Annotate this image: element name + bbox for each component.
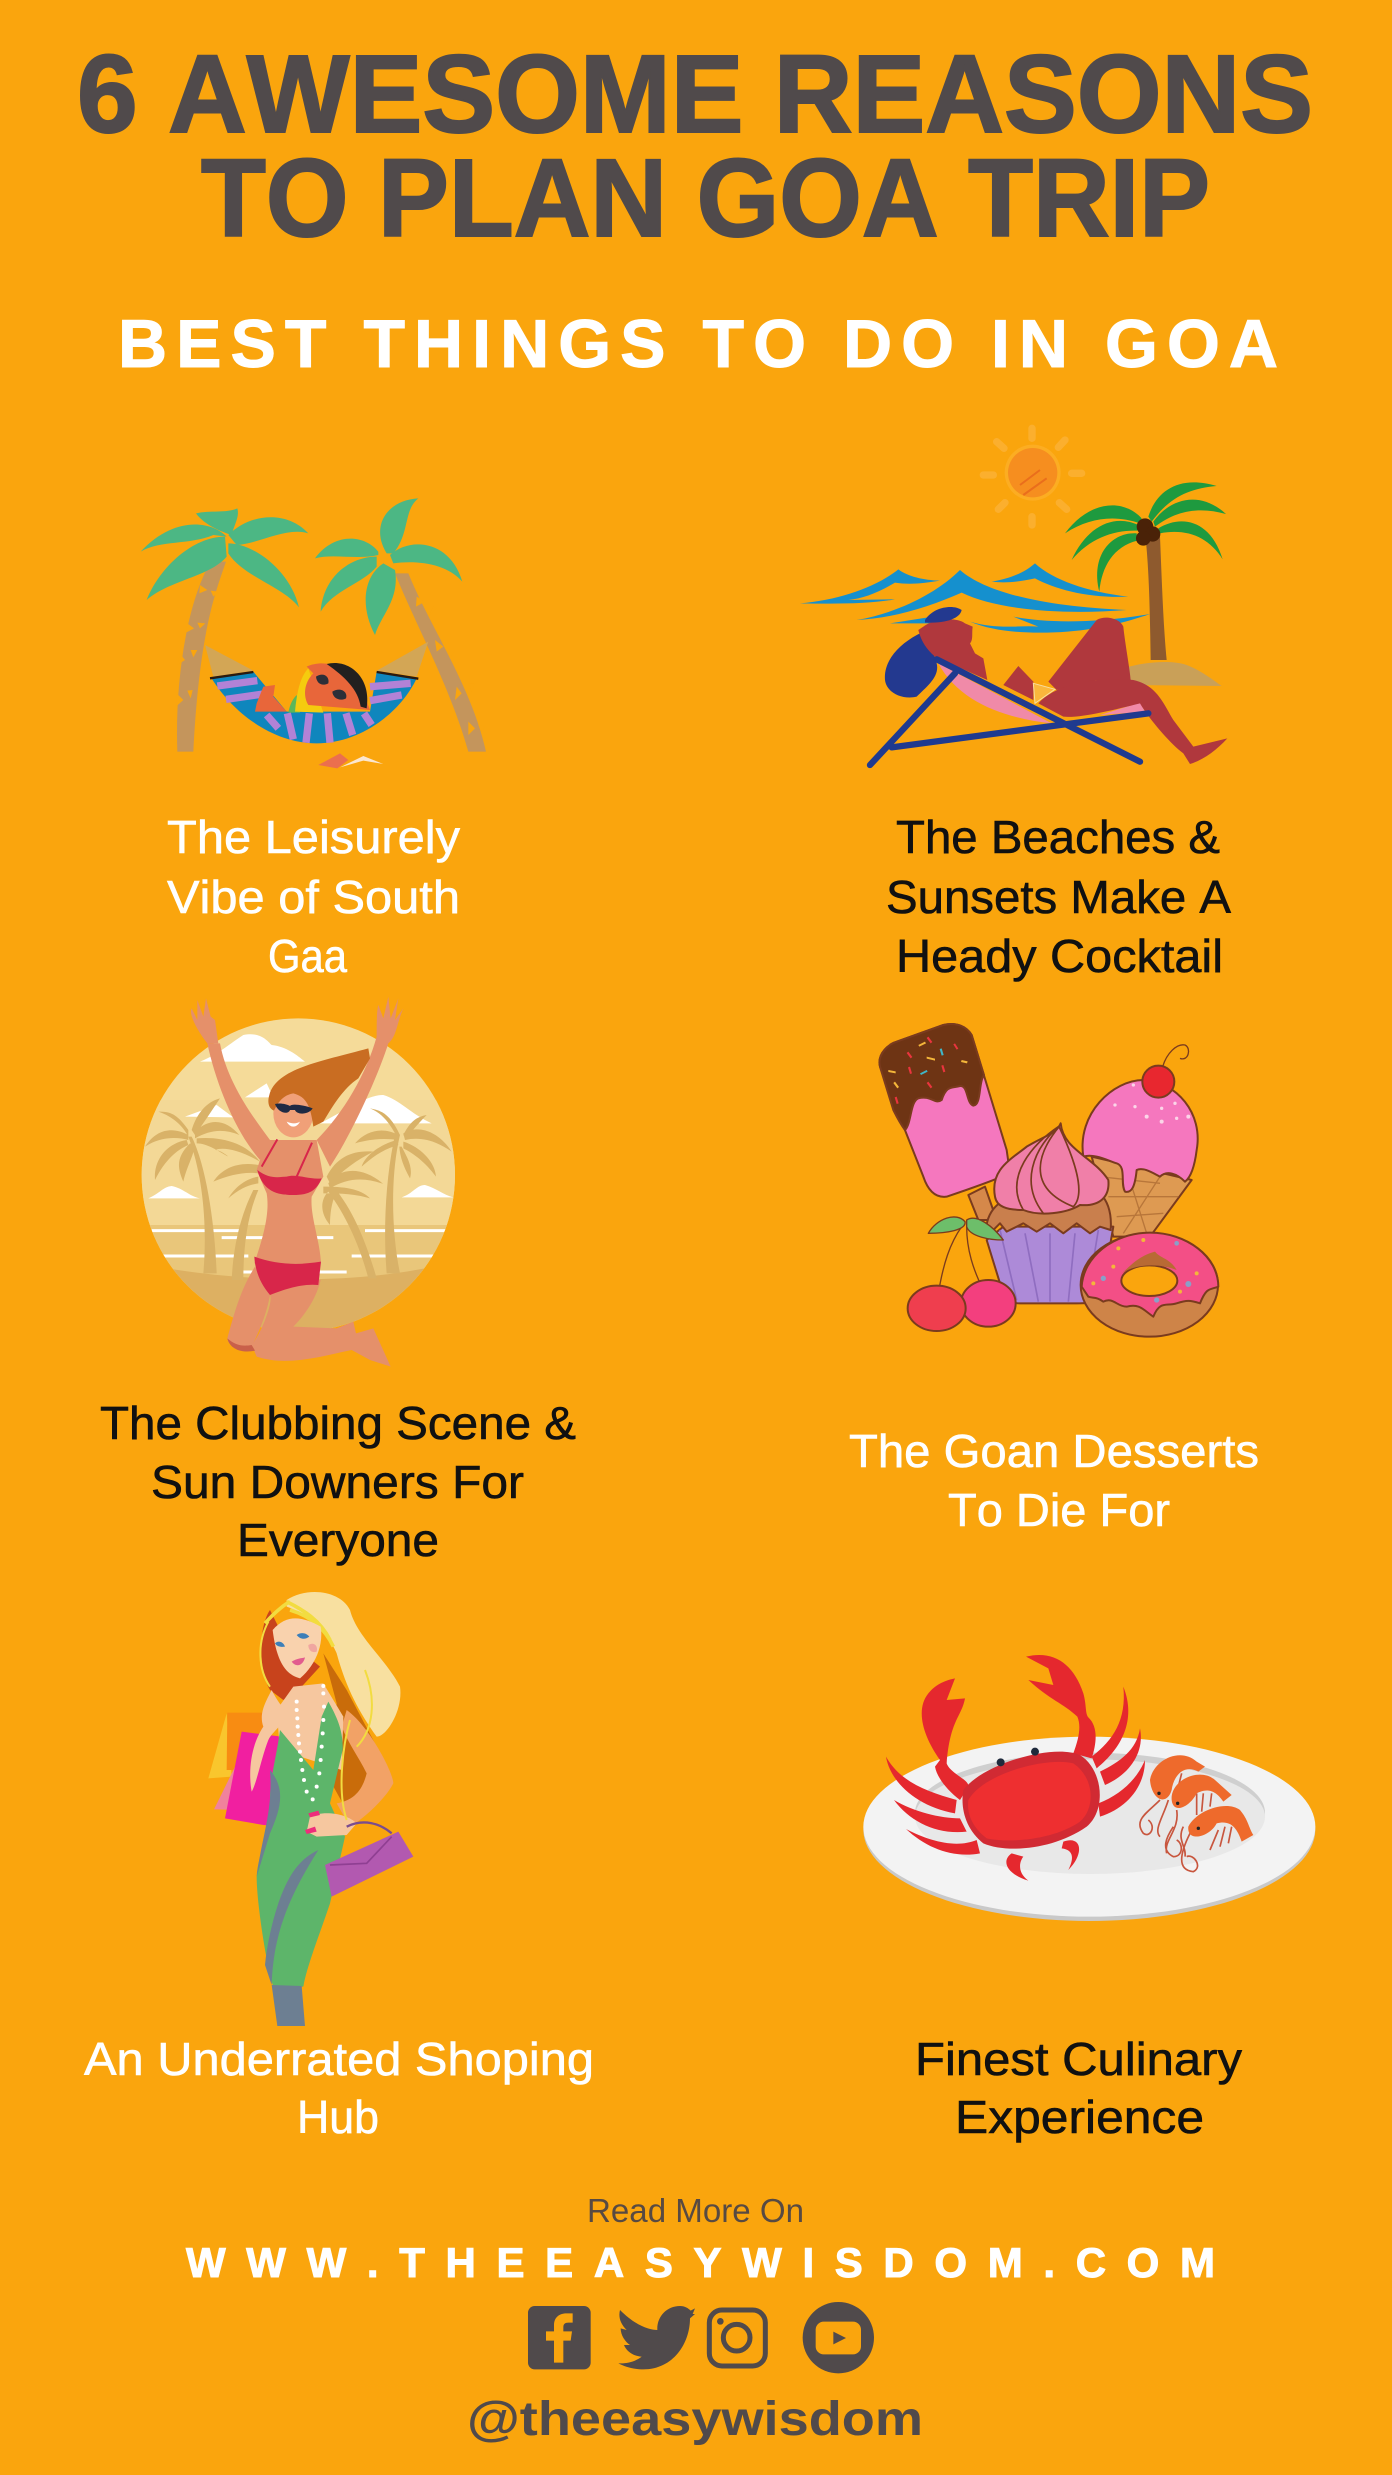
caption: leisurely vibe — [167, 811, 460, 982]
icon: facebook — [528, 2306, 591, 2369]
caption: shopping hub: Hub — [297, 2091, 379, 2143]
icon: hammock between palm trees — [141, 498, 486, 768]
icon: woman with shopping bags — [208, 1592, 413, 2026]
caption: goan desserts: The Goan Desserts — [849, 1425, 1259, 1477]
icon: youtube — [803, 2302, 874, 2373]
caption: beaches and sunsets: The Beaches & — [896, 811, 1220, 863]
caption: beaches and sunsets: Sunsets Make A — [886, 871, 1231, 923]
caption: clubbing scene: The Clubbing Scene & — [100, 1397, 576, 1449]
title — [77, 33, 1313, 260]
title: 6 AWESOME REASONS — [77, 33, 1313, 156]
subtitle: BEST THINGS TO DO IN GOA — [118, 306, 1278, 382]
caption: clubbing scene — [100, 1397, 576, 1566]
caption: beaches and sunsets: Heady Cocktail — [896, 930, 1223, 982]
icon: crab and prawns on plate — [863, 1655, 1315, 1921]
social icons — [528, 2302, 874, 2373]
caption: leisurely vibe: Vibe of South — [167, 871, 460, 923]
title: TO PLAN GOA TRIP — [201, 137, 1210, 260]
caption: leisurely vibe: Gaa — [268, 930, 347, 982]
caption: culinary experience: Finest Culinary — [915, 2033, 1242, 2085]
icon: instagram — [709, 2310, 765, 2366]
caption: shopping hub: An Underrated Shoping — [84, 2033, 594, 2085]
icon: goan desserts — [879, 1024, 1218, 1337]
social handle: @theeasywisdom — [467, 2393, 923, 2446]
caption: goan desserts — [849, 1425, 1259, 1536]
caption: shopping hub — [84, 2033, 594, 2143]
caption: clubbing scene: Sun Downers For — [151, 1456, 524, 1508]
caption: culinary experience — [915, 2033, 1242, 2143]
caption: goan desserts: To Die For — [948, 1484, 1170, 1536]
icon: jumping woman on beach — [140, 997, 460, 1367]
icon: woman on beach deck chair — [800, 428, 1227, 765]
website url: WWW.THEEASYWISDOM.COM — [186, 2239, 1215, 2286]
caption: clubbing scene: Everyone — [237, 1514, 439, 1566]
caption: culinary experience: Experience — [955, 2091, 1204, 2143]
icon: twitter — [618, 2306, 695, 2369]
caption: beaches and sunsets — [886, 811, 1231, 982]
caption: leisurely vibe: The Leisurely — [167, 811, 460, 863]
read more label: Read More On — [587, 2192, 804, 2229]
